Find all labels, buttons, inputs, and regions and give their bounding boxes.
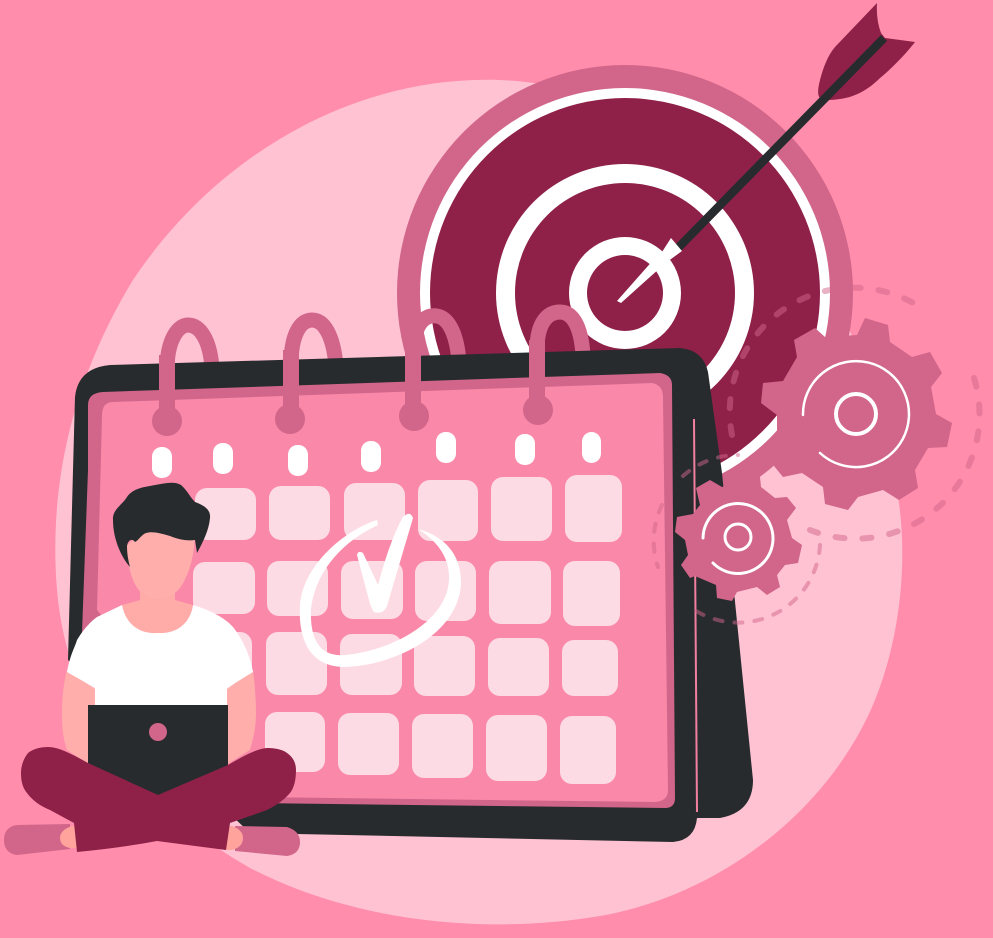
ankles — [60, 826, 243, 850]
dashed orbit large gear — [730, 288, 980, 539]
large gear — [761, 318, 952, 510]
binder ring backs — [167, 312, 583, 400]
calendar stand line — [694, 419, 697, 812]
right shoe — [235, 826, 300, 856]
laptop logo — [149, 723, 167, 741]
person — [4, 483, 300, 856]
date grid — [190, 475, 622, 784]
arms — [62, 670, 256, 765]
calendar page — [97, 383, 668, 802]
dashed orbit small gear — [654, 455, 820, 623]
target — [397, 65, 853, 521]
neck — [122, 585, 193, 634]
background blob — [55, 80, 902, 924]
arrow — [617, 3, 915, 303]
calendar page border — [82, 373, 675, 808]
calendar holes — [152, 432, 601, 478]
hair — [113, 483, 210, 567]
face — [127, 528, 195, 599]
laptop — [88, 705, 228, 797]
legs — [21, 747, 296, 852]
small gear — [675, 477, 802, 601]
check mark circle — [300, 514, 461, 667]
left shoe — [4, 824, 70, 855]
t-shirt — [67, 605, 253, 707]
binder ring fronts — [152, 340, 553, 436]
calendar back — [68, 348, 753, 842]
